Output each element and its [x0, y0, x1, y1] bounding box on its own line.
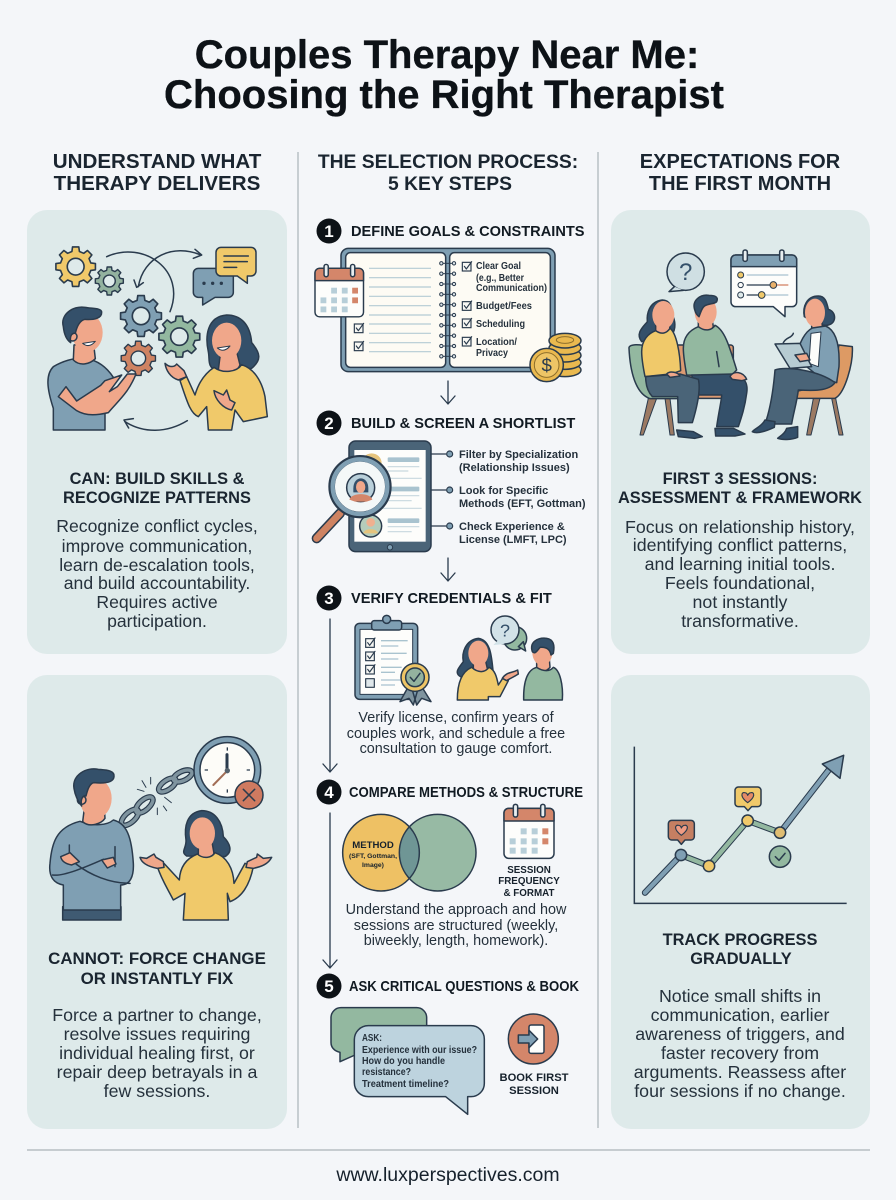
heading: expectations for the first month — [640, 151, 841, 195]
step 2 heading: BUILD & SCREEN A SHORTLIST — [351, 416, 575, 432]
text: step 3 description: consultation to gauge comfort. — [360, 741, 552, 757]
step 4 badge — [316, 780, 342, 804]
heading: understand what therapy delivers — [53, 150, 262, 195]
heading: understand what therapy delivers: UNDERSTAND WHAT — [53, 150, 262, 173]
text: can body: Requires active — [96, 592, 218, 612]
text: step 3 description — [347, 710, 565, 757]
text: session frequency label: SESSION — [507, 865, 551, 876]
text: can body: Recognize conflict cycles, — [56, 516, 258, 536]
step 5: ask critical questions and book — [316, 974, 579, 1114]
text: can body: participation. — [107, 611, 207, 631]
text: shortlist criteria: Methods (EFT, Gottman) — [459, 498, 586, 510]
woman — [457, 638, 493, 677]
woman — [184, 811, 230, 857]
text: step 3 description: Verify license, confirm years of — [358, 710, 555, 726]
text: session frequency label: FREQUENCY — [498, 876, 560, 887]
text: step 3 description: couples work, and schedule a free — [347, 726, 565, 742]
step 4 badge: 4 — [324, 783, 334, 802]
therapist — [804, 296, 835, 325]
panel: track progress — [611, 675, 870, 1129]
text: checklist items: (e.g., Better — [476, 273, 524, 284]
heading: can build skills: CAN: BUILD SKILLS & — [70, 470, 245, 488]
text: first sessions body — [625, 517, 855, 631]
man — [698, 317, 713, 332]
text: checklist items — [476, 261, 547, 359]
step 1 badge: 1 — [324, 222, 334, 241]
text: can body: learn de-escalation tools, — [59, 555, 255, 575]
text: book first session — [500, 1072, 569, 1097]
step 2 badge — [316, 410, 342, 436]
text: shortlist criteria: Filter by Specialization — [459, 449, 578, 461]
text: questions: Treatment timeline? — [362, 1079, 449, 1090]
text: track progress body: arguments. Reassess after — [634, 1062, 846, 1082]
text: track progress body — [634, 986, 846, 1101]
heading: the selection process: THE SELECTION PROCESS: — [318, 152, 578, 173]
text: first sessions body: not instantly — [693, 592, 788, 612]
step 4 heading: COMPARE METHODS & STRUCTURE — [349, 785, 583, 801]
chairs — [640, 398, 843, 435]
arrow: step 3 to 4 — [323, 619, 337, 772]
text: track progress body: faster recovery from — [661, 1043, 819, 1063]
woman — [639, 300, 675, 342]
text: shortlist criteria: Look for Specific — [459, 485, 548, 497]
text: step 4 description: biweekly, length, homework). — [364, 933, 548, 949]
icon: clipboard with rosette: ? — [500, 621, 510, 641]
text: first sessions body: Feels foundational, — [665, 573, 815, 593]
text: session frequency label — [498, 865, 560, 899]
text: cannot body: individual healing first, or — [59, 1043, 255, 1063]
heading: track progress — [663, 931, 817, 968]
text: shortlist criteria: License (LMFT, LPC) — [459, 534, 567, 546]
title: Couples Therapy Near Me: — [195, 33, 699, 77]
text: checklist items: Communication) — [476, 283, 547, 294]
text: questions — [362, 1033, 477, 1090]
step 1 heading: DEFINE GOALS & CONSTRAINTS — [351, 224, 585, 240]
text: checklist items: Clear Goal — [476, 261, 521, 272]
text: cannot body: resolve issues requiring — [64, 1024, 250, 1044]
step 3: verify credentials and fit — [316, 586, 565, 772]
step 3 badge: 3 — [324, 589, 334, 608]
heading: first 3 sessions: ASSESSMENT & FRAMEWORK — [618, 489, 862, 507]
icon: notebook with calendar and coins: $ — [541, 355, 552, 376]
text: questions: How do you handle — [362, 1056, 445, 1067]
heading: the selection process — [318, 152, 578, 195]
icon: notebook with calendar and coins — [315, 248, 581, 382]
text: step 4 description: Understand the approach and how — [346, 902, 567, 918]
text: step 4 description — [346, 902, 567, 949]
pants — [692, 374, 747, 427]
text: checklist items: Privacy — [476, 348, 508, 359]
text: questions: ASK: — [362, 1033, 382, 1044]
heading: cannot force change: OR INSTANTLY FIX — [81, 969, 234, 988]
title — [164, 33, 724, 117]
text: can body — [56, 516, 258, 631]
illustration: couple meeting with therapist — [629, 250, 852, 439]
heading: can build skills: RECOGNIZE PATTERNS — [63, 489, 251, 507]
heading: understand what therapy delivers: THERAPY DELIVERS — [54, 172, 260, 195]
woman — [207, 315, 259, 371]
man — [48, 358, 113, 430]
text: questions: resistance? — [362, 1067, 411, 1078]
footer: website: www.luxperspectives.com — [335, 1164, 560, 1186]
icon: speech bubbles — [331, 1008, 558, 1114]
text: questions: Experience with our issue? — [362, 1045, 477, 1056]
text: track progress body: communication, earlier — [651, 1005, 830, 1025]
text: first sessions body: identifying conflict patterns, — [633, 535, 847, 555]
heading: expectations for the first month: EXPECTATIONS FOR — [640, 151, 841, 173]
step 5 heading: ASK CRITICAL QUESTIONS & BOOK — [349, 979, 579, 995]
text: can body: improve communication, — [62, 536, 252, 556]
text: checklist items: Scheduling — [476, 319, 525, 330]
text: session frequency label: & FORMAT — [504, 888, 554, 899]
text: cannot body: few sessions. — [104, 1081, 210, 1101]
text: book first session: BOOK FIRST — [500, 1072, 569, 1084]
text: track progress body: four sessions if no change. — [634, 1081, 846, 1101]
column divider right — [597, 152, 599, 1128]
heading: track progress: GRADUALLY — [690, 950, 792, 968]
arrow: step 1 to 2 — [441, 381, 455, 404]
icon: tablet with magnifier — [317, 441, 453, 552]
heading: first 3 sessions: FIRST 3 SESSIONS: — [663, 470, 817, 488]
text: shortlist criteria: (Relationship Issues) — [459, 462, 570, 474]
illustration: broken chain, clock and couple — [50, 737, 272, 920]
column divider left — [297, 152, 299, 1128]
chart: rising progress line — [634, 747, 847, 903]
text: venn labels: METHOD — [352, 840, 394, 851]
text: cannot body: Force a partner to change, — [52, 1005, 262, 1025]
text: cannot body: repair deep betrayals in a — [57, 1062, 257, 1082]
panel: first 3 sessions — [611, 210, 870, 654]
man — [537, 655, 550, 671]
step 2: build and screen a shortlist — [316, 410, 586, 552]
heading: first 3 sessions — [618, 470, 862, 507]
step 5 badge — [316, 974, 342, 998]
step 5 badge: 5 — [324, 977, 334, 996]
icon: clipboard with rosette — [355, 615, 563, 705]
illustration: couple with gears and conversation — [48, 247, 267, 430]
text: cannot body — [52, 1005, 262, 1101]
step 1 badge — [316, 218, 342, 244]
text: checklist items: Location/ — [476, 337, 517, 348]
heading: can build skills — [63, 470, 251, 507]
text: checklist items: Budget/Fees — [476, 301, 532, 312]
chart: venn diagram and calendar — [343, 804, 554, 891]
heading: expectations for the first month: THE FIRST MONTH — [649, 173, 831, 195]
panel: can build skills — [27, 210, 287, 654]
text: shortlist criteria: Check Experience & — [459, 521, 565, 533]
text: step 4 description: sessions are structured (weekly, — [354, 918, 558, 934]
step 1: define goals and constraints — [315, 218, 585, 382]
footer divider — [27, 1149, 870, 1151]
panel: cannot force change — [27, 675, 287, 1129]
man — [63, 907, 121, 920]
text: track progress body: Notice small shifts in — [659, 986, 821, 1006]
text: venn labels: Image) — [362, 862, 384, 869]
text: book first session: SESSION — [509, 1085, 559, 1097]
text: can body: and build accountability. — [64, 573, 250, 593]
step 3 badge — [316, 586, 342, 610]
text: first sessions body: Focus on relationship history, — [625, 517, 855, 537]
text: first sessions body: and learning initial tools. — [645, 554, 835, 574]
heading: the selection process: 5 KEY STEPS — [388, 174, 512, 195]
heading: cannot force change: CANNOT: FORCE CHANGE — [48, 949, 266, 968]
heading: cannot force change — [48, 949, 266, 988]
text: track progress body: awareness of triggers, and — [635, 1024, 845, 1044]
step 3 heading: VERIFY CREDENTIALS & FIT — [351, 591, 552, 607]
arrow: step 4 to 5 — [323, 813, 337, 968]
text: first sessions body: transformative. — [681, 611, 799, 631]
step 2 badge: 2 — [324, 414, 334, 433]
heading: track progress: TRACK PROGRESS — [663, 931, 817, 949]
step 4: compare methods and structure — [316, 780, 583, 968]
text: venn labels — [349, 840, 397, 869]
text: venn labels: (SFT, Gottman, — [349, 853, 397, 860]
arrow: step 2 to 3 — [441, 558, 455, 581]
title: Choosing the Right Therapist — [164, 73, 724, 117]
text: shortlist criteria — [459, 449, 586, 546]
illustration: couple meeting with therapist: ? — [679, 259, 692, 286]
